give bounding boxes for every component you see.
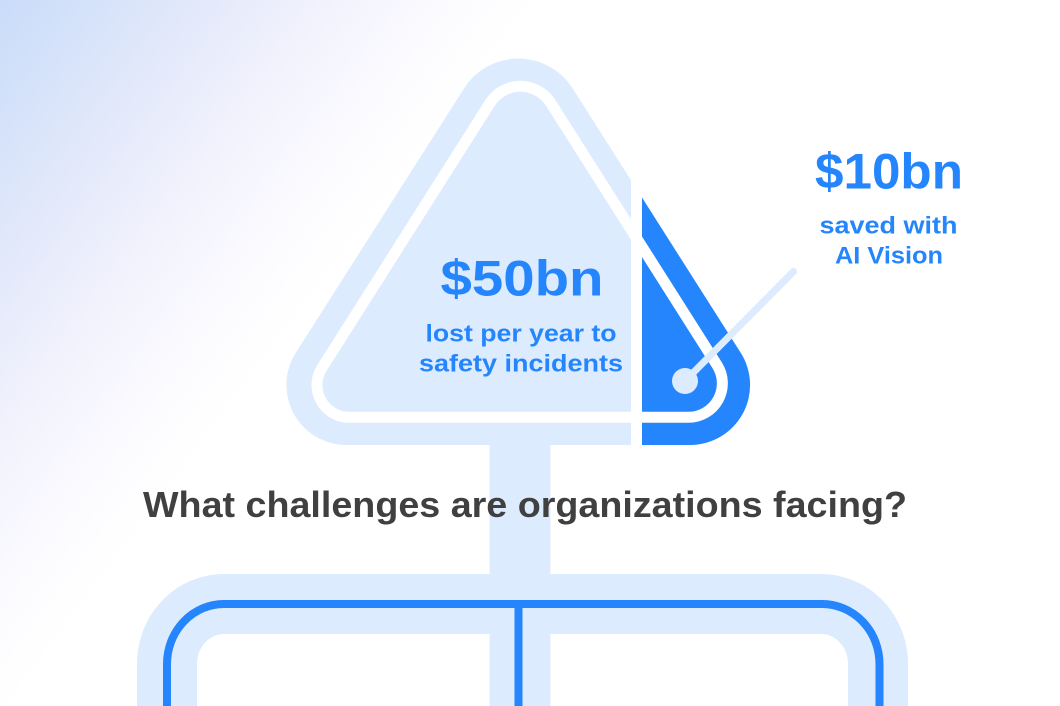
warning triangle: [286, 59, 750, 445]
description: safety incidents: [419, 351, 623, 378]
description: saved with: [820, 212, 958, 239]
triangle: blue saved portion: [642, 198, 750, 445]
infographic: warning sign: [137, 58, 960, 706]
blue connector lines: [167, 604, 880, 706]
callout pointer: [672, 272, 794, 394]
value: $10bn: [815, 143, 963, 199]
white divider: [631, 182, 642, 445]
description: lost per year to: [426, 321, 616, 348]
triangle: light portion: [286, 58, 631, 445]
pointer dot: [672, 368, 698, 394]
heading: What challenges are organizations facing?: [143, 484, 907, 525]
frame band: [167, 604, 878, 706]
triangle: white inner outline: [317, 86, 722, 417]
stat: $50bn lost: [419, 251, 623, 378]
stat: $10bn saved: [815, 143, 963, 269]
value: $50bn: [440, 251, 604, 307]
sign post and branching frame: [167, 440, 880, 706]
post: [490, 440, 550, 706]
pointer line: [685, 272, 794, 381]
description: AI Vision: [835, 242, 943, 269]
